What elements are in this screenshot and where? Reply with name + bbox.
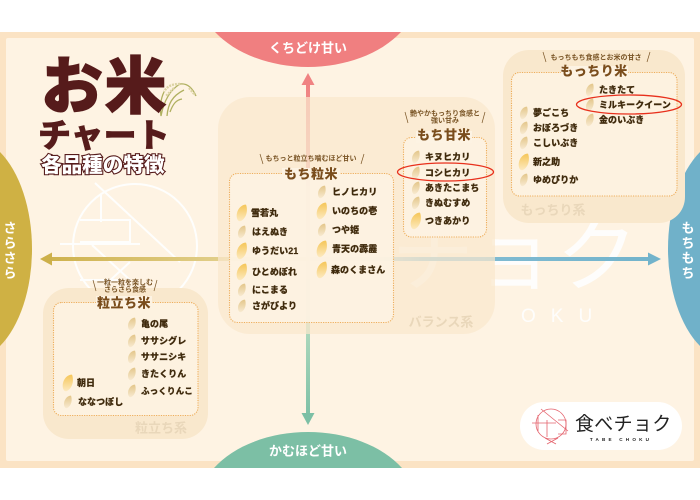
item: ゆうだい21: ゆうだい21: [252, 246, 298, 256]
item: つや姫: [318, 224, 359, 236]
heading: もち粒米: もち粒米: [284, 166, 338, 182]
left axis cap: さらさら: さ: [3, 250, 17, 266]
logo tagline: TABE CHOKU: [590, 437, 652, 442]
card: 粒立ち米: [54, 302, 198, 416]
title: チャート: チャート: [38, 117, 170, 154]
right axis cap: もちもち: ち: [681, 236, 695, 250]
card: もち甘米: [404, 108, 486, 237]
watermark wordmark: OKU: [521, 306, 607, 327]
item: 金のいぶき: [586, 114, 644, 126]
item: 夢ごこち: 夢ごこち: [533, 107, 569, 118]
item: 森のくまさん: [317, 262, 385, 278]
item: いのちの壱: [317, 203, 377, 219]
logo wordmark: 食べチョク: [575, 413, 672, 435]
item: たきたて: [586, 84, 635, 96]
item: 朝日: [63, 375, 95, 391]
item: さがびより: [238, 300, 297, 312]
item: 新之助: [519, 154, 560, 170]
item: ひとめぼれ: [237, 264, 297, 280]
caption: もっちり米: [543, 52, 650, 62]
item: 亀の尾: [128, 318, 168, 330]
watermark logo: [60, 183, 197, 308]
item: ななつぼし: ななつぼし: [78, 396, 123, 407]
top axis cap: くちどけ甘い: [215, 32, 401, 67]
item: あきたこまち: あきたこまち: [425, 183, 479, 193]
label: 粒立ち系: 粒立ち系: [135, 420, 187, 436]
item: きぬむすめ: きぬむすめ: [425, 198, 470, 208]
item: ふっくりんこ: [128, 385, 193, 397]
item: 雪若丸: 雪若丸: [251, 207, 278, 218]
item: 青天の霹靂: 青天の霹靂: [332, 243, 377, 254]
title: お米: お米: [41, 53, 168, 122]
item: ササニシキ: [128, 351, 186, 363]
item: ササシグレ: [128, 335, 186, 347]
item: 森のくまさん: 森のくまさん: [331, 264, 385, 275]
card: もち粒米: [230, 154, 394, 322]
highlight: コシヒカリ: [398, 163, 494, 181]
item: ササニシキ: ササニシキ: [141, 352, 186, 362]
panel: 粒立ち系: [43, 278, 208, 439]
logo: 食べチョク: [520, 402, 682, 450]
item: きたくりん: [128, 368, 186, 380]
item: つきあかり: つきあかり: [425, 216, 470, 226]
left axis cap: さらさら: [0, 152, 32, 346]
caption: 粒立ち米: [93, 278, 157, 294]
caption: もち粒米: もちっと粒立ち噛むほど甘い: [266, 154, 356, 162]
right axis cap: もちもち: も: [681, 250, 695, 266]
watermark wordmark: チョク: [392, 211, 638, 302]
caption: もち甘米: 強い甘み: [431, 116, 459, 124]
label: もっちり系: もっちり系: [520, 202, 586, 218]
item: ミルキークイーン: ミルキークイーン: [599, 99, 671, 110]
item: 雪若丸: [237, 205, 278, 221]
icon: rice plant: [160, 84, 196, 116]
item: こしいぶき: [520, 137, 578, 149]
caption: もち甘米: 艶やかもっちり食感と: [410, 108, 480, 118]
item: にこまる: [238, 284, 288, 296]
item: キヌヒカリ: キヌヒカリ: [425, 152, 470, 162]
item: 夢ごこち: [520, 107, 569, 119]
icon: logo mark: [532, 409, 568, 444]
item: にこまる: にこまる: [252, 285, 288, 295]
item: ななつぼし: [64, 396, 123, 408]
panel: もっちり系: [503, 50, 685, 223]
item: 朝日: 朝日: [77, 377, 95, 388]
item: おぼろづき: おぼろづき: [533, 122, 578, 133]
item: コシヒカリ: コシヒカリ: [425, 168, 470, 178]
caption: もち甘米: [405, 108, 485, 124]
left axis cap: さらさら: ら: [3, 236, 17, 250]
caption: 粒立ち米: さらさら食感: [104, 284, 146, 294]
right axis cap: もちもち: も: [681, 220, 695, 236]
right axis cap: もちもち: [668, 152, 700, 346]
item: こしいぶき: こしいぶき: [533, 138, 578, 148]
caption: 粒立ち米: 一粒一粒を楽しむ: [97, 278, 153, 286]
item: 青天の霹靂: [317, 241, 377, 257]
vertical axis arrow: [302, 73, 314, 425]
item: ヒノヒカリ: [318, 186, 377, 198]
left axis cap: さらさら: ら: [3, 266, 17, 280]
item: 金のいぶき: 金のいぶき: [599, 115, 644, 125]
item: ミルキークイーン: [586, 99, 671, 111]
item: おぼろづき: [520, 122, 578, 134]
item: ゆめぴりか: ゆめぴりか: [533, 175, 578, 185]
item: 亀の尾: 亀の尾: [141, 318, 168, 329]
item: さがびより: さがびより: [252, 300, 297, 311]
item: きたくりん: きたくりん: [141, 369, 186, 379]
item: たきたて: たきたて: [599, 85, 635, 95]
heading: もっちり米: もっちり米: [560, 64, 628, 78]
subtitle: 各品種の特徴: 各品種の特徴: [41, 153, 165, 177]
item: はえぬき: はえぬき: [252, 227, 288, 237]
item: ヒノヒカリ: ヒノヒカリ: [332, 187, 377, 197]
item: ササシグレ: ササシグレ: [141, 335, 186, 346]
heading: 粒立ち米: 粒立ち米: [97, 296, 151, 310]
item: ゆめぴりか: [520, 174, 578, 186]
item: ゆうだい21: [237, 243, 298, 259]
item: ひとめぼれ: ひとめぼれ: [252, 266, 297, 277]
item: はえぬき: [238, 226, 288, 238]
item: 新之助: 新之助: [533, 156, 560, 167]
right axis cap: もちもち: ち: [681, 266, 695, 280]
caption: もっちり米: もっちもち食感とお米の甘さ: [550, 52, 642, 62]
heading: もち甘米: もち甘米: [417, 128, 471, 142]
caption: もち粒米: [260, 154, 364, 164]
item: いのちの壱: いのちの壱: [332, 205, 377, 216]
horizontal axis arrow: [40, 252, 661, 266]
left axis cap: さらさら: さ: [3, 220, 17, 236]
bottom axis cap: かむほど甘い: [214, 432, 402, 468]
card: もっちり米: [512, 72, 677, 196]
top axis cap: くちどけ甘い: くちどけ甘い: [269, 40, 347, 56]
highlight: ミルキークイーン: [576, 95, 682, 114]
bottom axis cap: かむほど甘い: かむほど甘い: [269, 444, 347, 458]
item: つや姫: つや姫: [332, 224, 359, 235]
panel: balance: [218, 97, 495, 334]
label: バランス系: バランス系: [409, 314, 473, 330]
item: ふっくりんこ: ふっくりんこ: [141, 386, 193, 396]
